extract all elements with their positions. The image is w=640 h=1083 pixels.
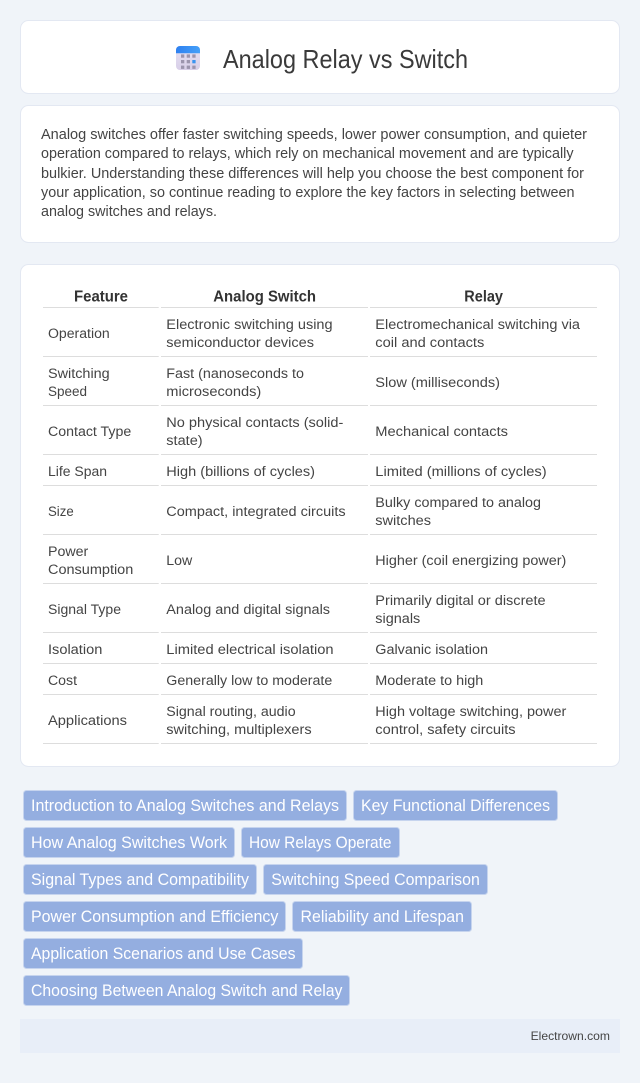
tag: Introduction to Analog Switches and Relays [24, 790, 346, 820]
table row: Contact Type: Contact Type [48, 424, 131, 440]
table row: Signal Type: Primarily digital or discrete [375, 593, 546, 609]
table row: Power Consumption: Higher (coil energizing power) [375, 553, 566, 569]
title: Analog Relay vs Switch [223, 46, 468, 74]
tag: Switching Speed Comparison [264, 864, 488, 894]
table row: Life Span: Life Span [48, 464, 107, 480]
text block: introduction paragraph: your application, so continue reading to explore the key factors in selecting between [41, 185, 574, 201]
panel: comparison table [20, 264, 620, 766]
panel: header [20, 20, 620, 94]
text block: introduction paragraph: operation compared to relays, which rely on mechanical movement and are typically [41, 146, 574, 162]
tag: Signal Types and Compatibility: Signal Types and Compatibility [31, 871, 250, 889]
table header row: Relay [464, 289, 503, 306]
table row: Applications: control, safety circuits [375, 722, 516, 738]
table row: Isolation: Isolation [48, 642, 102, 658]
text block: introduction paragraph: bulkier. Understanding these differences will help you choose the best component for [41, 166, 584, 182]
table row: Switching Speed: Fast (nanoseconds to [166, 366, 304, 382]
table row: Size: switches [375, 513, 431, 529]
table row: Signal Type: Analog and digital signals [166, 602, 330, 618]
tag: Key Functional Differences [354, 790, 558, 820]
tag: Application Scenarios and Use Cases [24, 938, 302, 968]
table row: Applications: switching, multiplexers [166, 722, 312, 738]
tag: Signal Types and Compatibility [24, 864, 256, 894]
table row: Operation: Electromechanical switching via [375, 317, 580, 333]
tag: How Relays Operate: How Relays Operate [249, 834, 392, 852]
table row: Contact Type: No physical contacts (solid- [166, 415, 344, 431]
table row: Isolation: Limited electrical isolation [166, 642, 334, 658]
table row: Cost: Cost [48, 673, 77, 689]
table row: Signal Type [48, 593, 546, 627]
table row: Applications: High voltage switching, power [375, 704, 567, 720]
table row: Cost [48, 673, 483, 689]
table row: Size: Bulky compared to analog [375, 495, 541, 511]
tag: How Relays Operate [242, 828, 400, 858]
table row: Switching Speed: Switching [48, 366, 110, 382]
icon: calendar grid [176, 46, 200, 70]
table row: Applications: Applications [48, 713, 127, 729]
tag: How Analog Switches Work [24, 828, 234, 858]
text block: introduction paragraph: analog switches and relays. [41, 204, 217, 220]
table row: Operation: semiconductor devices [166, 335, 314, 351]
table header row: Feature [74, 289, 128, 306]
table row: Isolation: Galvanic isolation [375, 642, 488, 658]
tag: Power Consumption and Efficiency: Power Consumption and Efficiency [31, 908, 279, 926]
panel: introduction text [20, 106, 620, 242]
tag: Key Functional Differences: Key Functional Differences [361, 797, 550, 815]
table row: Applications: Signal routing, audio [166, 704, 296, 720]
table row: Size: Size [48, 504, 74, 520]
table row: Life Span: High (billions of cycles) [166, 464, 315, 480]
table row: Power Consumption: Consumption [48, 562, 133, 578]
tag: Reliability and Lifespan: Reliability and Lifespan [300, 908, 464, 926]
table row: Switching Speed [48, 366, 500, 400]
table row: Operation [48, 317, 580, 351]
footer credit text: Electrown.com [531, 1029, 610, 1043]
table row: Switching Speed: microseconds) [166, 384, 261, 400]
footer [20, 1019, 620, 1053]
table header row [74, 289, 503, 306]
tag: Application Scenarios and Use Cases: Application Scenarios and Use Cases [31, 945, 296, 963]
table row: Size: Compact, integrated circuits [166, 504, 346, 520]
table row: Signal Type: Signal Type [48, 602, 121, 618]
table row: Contact Type: state) [166, 433, 203, 449]
table row: Operation: Operation [48, 326, 110, 342]
table row: Operation: Electronic switching using [166, 317, 333, 333]
tag: Reliability and Lifespan [292, 902, 472, 932]
text block: introduction paragraph [41, 127, 587, 220]
table row: Operation: coil and contacts [375, 335, 484, 351]
tag: How Analog Switches Work: How Analog Switches Work [31, 834, 228, 852]
table row: Power Consumption: Low [166, 553, 193, 569]
tag: Choosing Between Analog Switch and Relay: Choosing Between Analog Switch and Relay [31, 982, 343, 1000]
table row: Cost: Generally low to moderate [166, 673, 332, 689]
table row: Signal Type: signals [375, 611, 420, 627]
table row: Switching Speed: Slow (milliseconds) [375, 375, 500, 391]
table row: Life Span [48, 464, 547, 480]
table row: Isolation [48, 642, 488, 658]
table row: Power Consumption [48, 544, 566, 578]
table row: Contact Type: Mechanical contacts [375, 424, 508, 440]
tag: Power Consumption and Efficiency [24, 902, 286, 932]
table row: Life Span: Limited (millions of cycles) [375, 464, 547, 480]
table row: Size [48, 495, 541, 529]
tag list: related topics [24, 790, 558, 1006]
table row: Power Consumption: Power [48, 544, 89, 560]
table row: Contact Type [48, 415, 508, 449]
text block: introduction paragraph: Analog switches offer faster switching speeds, lower power consumption, and quieter [41, 127, 587, 143]
table row: Cost: Moderate to high [375, 673, 483, 689]
table row: Switching Speed: Speed [48, 384, 87, 400]
tag: Switching Speed Comparison: Switching Speed Comparison [271, 871, 480, 889]
tag: Introduction to Analog Switches and Relays: Introduction to Analog Switches and Relays [31, 797, 339, 815]
table header row: Analog Switch [213, 289, 316, 306]
table row: Applications [48, 704, 567, 738]
tag: Choosing Between Analog Switch and Relay [24, 976, 350, 1006]
